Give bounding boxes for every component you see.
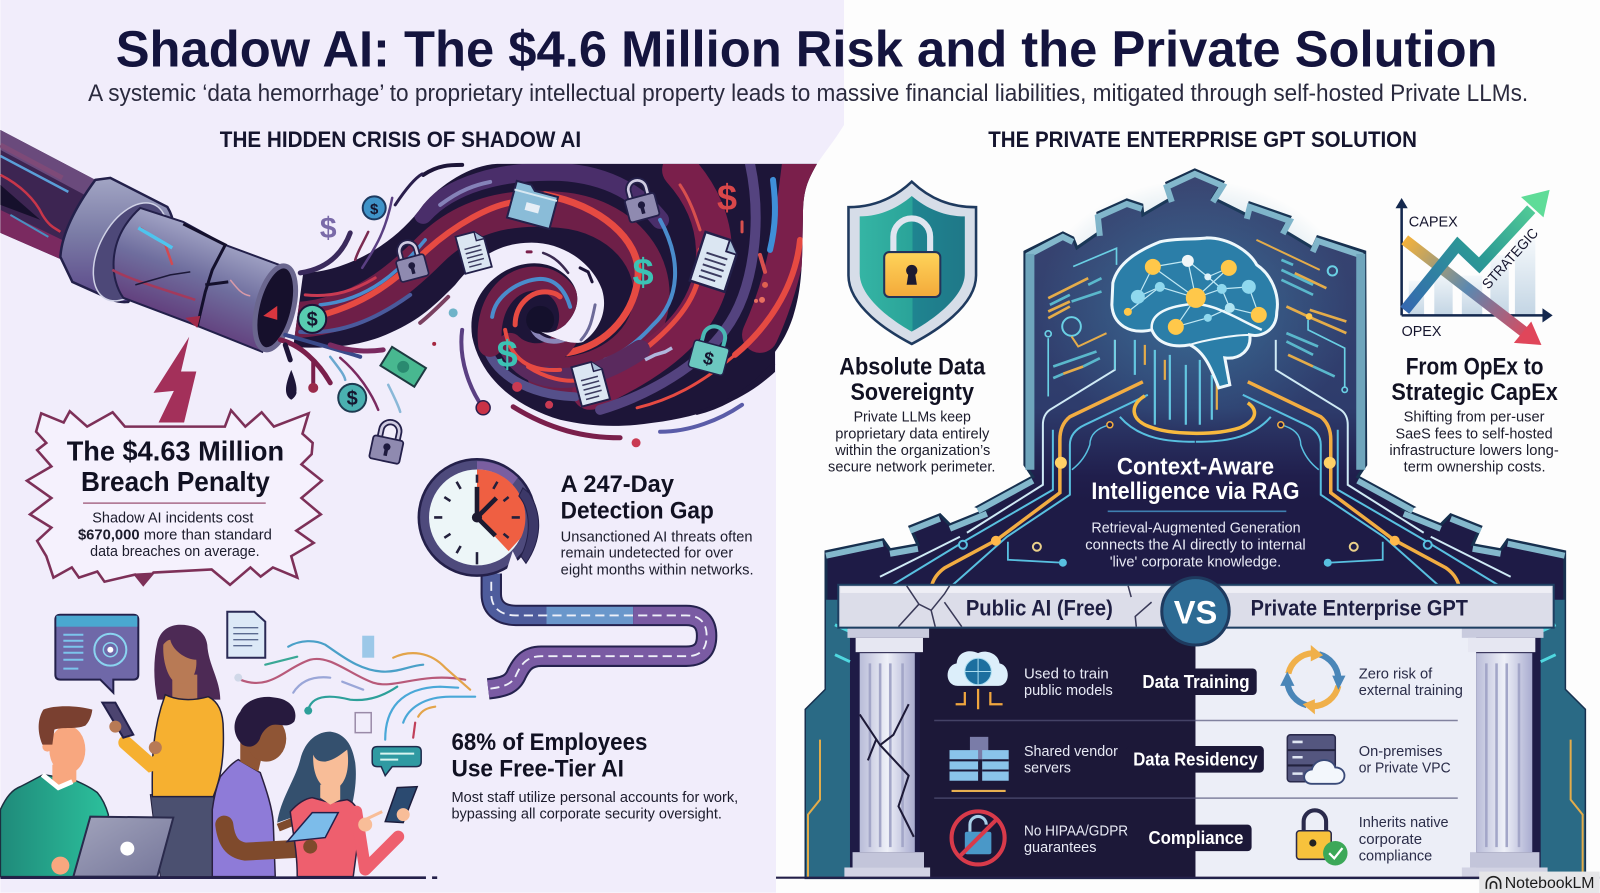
pipe: outer segment [0,130,95,260]
text: inherits: compliance [1359,848,1432,864]
person: woman in pink [277,732,417,877]
text block: opex to capex: SaeS fees to self-hosted [1396,426,1553,442]
icon: cloud with globe [948,651,1008,709]
text: no hipaa: guarantees [1024,840,1096,856]
heading: left section: THE HIDDEN CRISIS OF SHADOW AI [220,127,581,152]
text block: detection gap: Detection Gap [561,497,714,524]
illustration: data castle fortress [806,170,1585,878]
callout: breach penalty burst [27,410,322,586]
text block: data sovereignty: proprietary data entirely [835,426,990,442]
text block: detection gap: Unsanctioned AI threats often [561,529,753,545]
text block: data sovereignty [828,354,995,476]
circuit lines right [1196,340,1511,585]
text: used to train: Used to train [1024,667,1109,683]
text: shared vendor [1024,744,1118,777]
text block: opex to capex: Strategic CapEx [1391,379,1558,406]
icon: lock with check [1297,810,1348,865]
icon: lock top [620,177,660,223]
VS badge [1162,578,1229,645]
text block: data sovereignty: secure network perimeter. [828,460,995,476]
row 1: data training [948,645,1463,714]
text: no hipaa: No HIPAA/GDPR [1024,823,1128,839]
text block: employees: 68% of Employees [451,729,647,756]
castle text heading: Context-Aware [1117,454,1274,481]
icon: sovereignty shield [848,182,976,344]
icon: banknote [380,347,426,387]
flowing strands at the pipe mouth [280,174,422,412]
swirl debris [420,165,773,438]
side wall strips [1030,254,1361,470]
pill: data training: Data Training [1142,671,1250,692]
icon: folder [507,181,559,229]
badge: NotebookLM: NotebookLM [1505,875,1595,892]
text block: opex to capex: infrastructure lowers long- [1389,443,1559,459]
icon: document bottom [571,360,610,407]
table: dark left panel [920,628,1195,878]
icon: oil drop [286,370,297,400]
icon: prohibited lock [952,811,1005,864]
text: inherits [1359,815,1449,864]
person: woman in yellow [102,625,225,877]
callout heading: The $4.63 Million [67,435,284,466]
badge: NotebookLM [1479,872,1600,893]
text: shared vendor: Shared vendor [1024,744,1118,760]
VS badge: VS [1174,594,1217,631]
text: on premises [1359,744,1451,777]
text block: employees: bypassing all corporate security oversight. [451,806,722,822]
tower gold traces [808,740,1583,878]
icon: dollar circle at pipe mouth: $ [307,309,318,331]
person: man in green sweater [0,706,173,877]
text: zero risk: Zero risk of [1359,667,1433,683]
callout body: Shadow AI incidents cost [92,511,253,527]
table: light right panel [1195,628,1476,878]
callout body [78,503,272,560]
chart: detection timeline road [488,574,707,689]
icon: teal lock right [688,322,734,376]
icon: cycle arrows [1280,645,1345,714]
text block: opex to capex: From OpEx to [1406,354,1543,381]
icon: teal chat bubble [372,747,421,776]
callout body: data breaches on average. [90,544,260,560]
table row dividers [934,721,1458,798]
person: man in purple shirt [212,697,320,877]
header: private enterprise GPT: Private Enterprise GPT [1251,595,1468,620]
text block: opex to capex [1389,354,1559,476]
glow behind brain [1035,180,1355,440]
icon: clock [419,459,539,576]
title: Shadow AI: The $4.6 Million Risk and the Private Solution [116,20,1498,77]
icon: teal dollar: $ [633,252,654,294]
icon: red dollar: $ [717,177,737,218]
text block: detection gap [561,471,754,579]
icon: lightning bolt [153,337,196,423]
circuit lines left [880,340,1195,585]
chart label: capex: CAPEX [1409,215,1458,231]
text block: detection gap: A 247-Day [561,471,674,498]
text: inherits: corporate [1359,832,1422,848]
icon: dollar circle at pipe mouth [298,305,326,333]
icon: lock left [392,239,429,282]
callout heading [67,435,284,497]
icon: floating document [227,612,265,658]
illustration: cracked pipe with collars [0,130,422,412]
text block: data sovereignty: Sovereignty [851,379,974,406]
callout body: $670,000 more than standard [78,527,272,543]
chart label: opex: OPEX [1402,324,1442,340]
castle divider [1108,510,1286,512]
brain [1112,238,1277,388]
text: zero risk [1359,667,1463,699]
text: shared vendor: servers [1024,761,1071,777]
icon: blue dollar coin [363,196,386,219]
heading: right section: THE PRIVATE ENTERPRISE GPT SOLUTION [988,127,1417,152]
castle walls [806,170,1585,878]
pipe: inner segment [112,208,225,326]
text: no hipaa [1024,823,1128,856]
text block: employees [451,729,738,822]
outer tower teal sides [806,600,1585,878]
text block: opex to capex: term ownership costs. [1404,460,1546,476]
icon: document left [455,230,492,274]
text: on premises: or Private VPC [1359,761,1451,777]
icon: red stream marker [263,306,277,320]
icon: dollar coin bottom [338,384,366,412]
chart label: strategic: STRATEGIC [1479,226,1542,293]
text: zero risk: external training [1359,683,1463,699]
icon: shared servers [950,737,1009,791]
text: inherits: Inherits native [1359,815,1449,831]
pipe: mouth segment [183,224,303,354]
castle text body: Retrieval-Augmented Generation [1091,521,1301,537]
text block: detection gap: remain undetected for over [561,546,733,562]
icon: purple dollar: $ [320,212,337,245]
side panel code lines [1045,240,1347,396]
text block: data sovereignty: Absolute Data [839,354,986,381]
castle text heading [1091,454,1300,505]
text block: detection gap: eight months within networks. [561,563,754,579]
pill: compliance: Compliance [1149,827,1243,848]
header: public AI: Public AI (Free) [966,595,1113,620]
row 2: data residency [950,735,1451,791]
illustration: four employees using phones and laptops [0,625,417,877]
icon: maroon drop [308,383,318,393]
text block: employees: Use Free-Tier AI [451,756,624,783]
text block: data sovereignty: Private LLMs keep [854,409,971,425]
icons: flying data and money [298,177,740,464]
chart arrow: CapEx rising [1405,190,1550,310]
background: left lavender panel [0,0,844,893]
text: used to train [1024,667,1113,699]
castle text body: 'live' corporate knowledge. [1110,554,1281,570]
icon: teal dollar inner: $ [497,334,518,376]
illustration: data streams from people [234,636,475,740]
row 3: compliance [952,810,1449,865]
text block: data sovereignty: within the organization’s [834,443,990,459]
beam header [838,585,1554,628]
castle text body: connects the AI directly to internal [1085,538,1306,554]
ground line right [776,877,1600,879]
icon: falling lock [369,419,407,464]
pipe: collar [60,178,183,313]
pill: data residency: Data Residency [1133,748,1258,769]
castle text body [1085,521,1306,570]
text: used to train: public models [1024,683,1113,699]
glowing ring [1134,396,1255,433]
text block: employees: Most staff utilize personal accounts for work, [451,790,738,806]
text: on premises: On-premises [1359,744,1442,760]
castle crown highlights [826,174,1565,556]
ground line left [0,876,437,879]
icon: blue dollar coin: $ [370,201,379,218]
icon: teal lock right: $ [701,348,716,370]
icon: AI chat panel [55,615,138,693]
callout heading: Breach Penalty [81,466,270,497]
text block: opex to capex: Shifting from per-user [1404,409,1545,425]
castle text heading: Intelligence via RAG [1091,478,1300,505]
pillar right [1462,628,1548,878]
illustration: data swirl vortex [293,164,817,447]
chart arrow: OpEx falling [1405,240,1541,345]
chart: OpEx to CapEx [1396,190,1553,345]
icon: broken chain [645,348,672,360]
light beams under brain [1135,340,1217,425]
subtitle: A systemic ‘data hemorrhage’ to proprietary intellectual property leads to massive financial liabilities, mitigated through self-hosted Private LLMs. [88,80,1528,107]
icon: dollar coin bottom: $ [347,388,358,410]
icon: server and cloud [1287,735,1344,784]
icon: document right [690,232,740,292]
pillar left with cracks [844,628,930,878]
